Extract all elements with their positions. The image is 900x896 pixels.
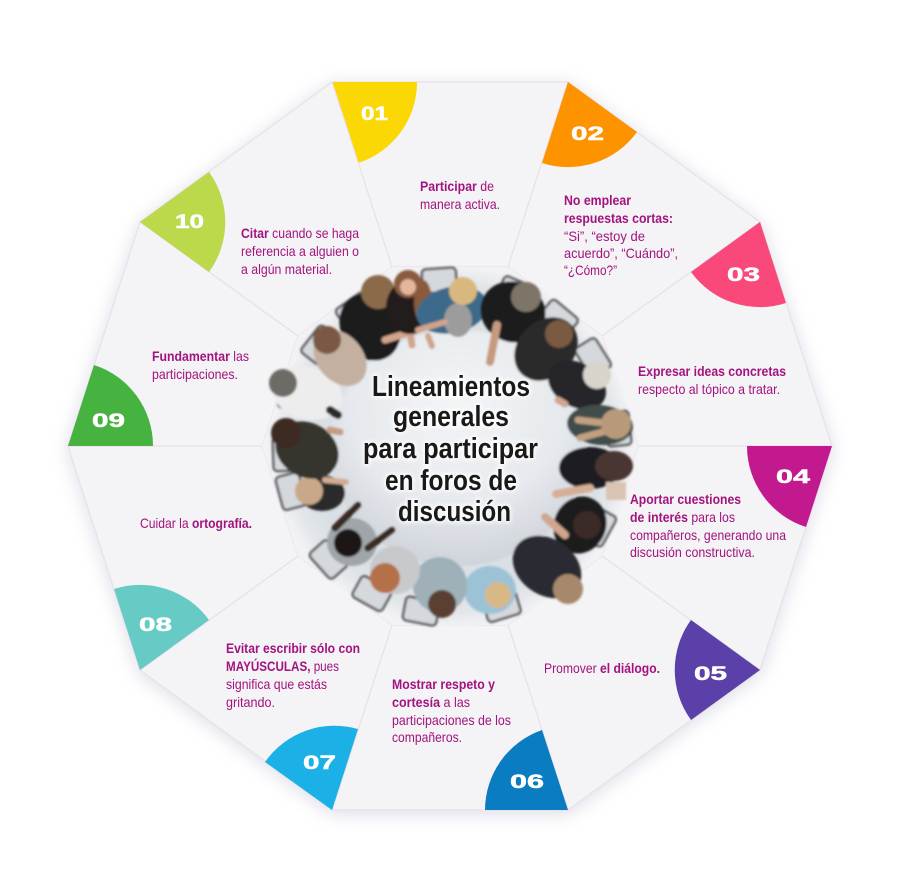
panel 01: participar [332,82,568,267]
text 02: “¿Cómo?” [564,262,617,278]
person 9 [544,488,616,562]
decagon shadow [68,85,832,813]
text 06: participaciones de los [392,712,511,728]
title: discusión [398,496,511,528]
text 07: MAYÚSCULAS, pues [226,657,339,674]
wedge 04 [747,446,832,527]
person 4 [470,271,556,362]
text 06 [392,676,511,745]
text 03 [638,363,786,397]
text 09: Fundamentar las [152,348,249,364]
text 02 [564,192,678,278]
person 15 [295,475,346,511]
title: generales [393,401,509,433]
number 08: 08 [139,614,172,636]
text 04 [630,491,786,560]
panel 03: ideas concretas [602,222,832,446]
wedge 03 [691,222,786,307]
text 04: compañeros, generando una [630,527,786,543]
text 02: “Si”, “estoy de [564,228,645,244]
person 7 [565,402,635,448]
text 07: Evitar escribir sólo con [226,640,360,656]
text 06: Mostrar respeto y [392,676,495,692]
number 07: 07 [303,752,336,774]
person 12 [413,557,467,618]
text 03: respecto al tópico a tratar. [638,381,780,397]
text 04: discusión constructiva. [630,544,755,560]
number 10: 10 [175,211,204,233]
text 09: participaciones. [152,366,238,382]
text 07: gritando. [226,694,275,710]
title: Lineamientos [372,371,530,403]
person 3 [412,277,492,346]
person 17 [265,359,349,427]
wedge 06 [485,730,568,810]
title: en foros de [385,465,517,497]
number 04: 04 [776,466,810,488]
wedge 02 [542,82,637,167]
person 8 [556,447,633,500]
text 09 [152,348,249,382]
person 11 [464,566,516,614]
title: para participar [363,433,538,465]
person 1 [327,275,417,372]
person 18 [302,319,378,397]
panel 04: cuestiones de interés [602,446,832,670]
text 03: Expresar ideas concretas [638,363,786,379]
text 01: manera activa. [420,196,500,212]
title: Lineamientos [372,371,530,403]
panel 10: citar [140,82,392,336]
text 07: significa que estás [226,676,327,692]
text 01: Participar de [420,178,494,194]
panel 07: mayúsculas [140,556,392,810]
person 6 [539,350,615,420]
panel 08: ortografía [68,446,298,670]
wedge 07 [265,726,358,810]
title: discusión [398,496,511,528]
number 01: 01 [361,103,388,125]
wedge 05 [675,620,760,720]
text 08: Cuidar la ortografía. [140,515,252,531]
number 06: 06 [510,771,544,793]
title: en foros de [385,465,517,497]
text 06: compañeros. [392,729,462,745]
number 02: 02 [571,123,604,145]
person 13 [370,546,420,594]
text 04: Aportar cuestiones [630,491,741,507]
panel 09: fundamentar [68,222,298,446]
title [363,371,538,528]
person 10 [501,523,593,611]
wedge 10 [140,172,225,272]
wedge 08 [114,585,209,670]
text 04: de interés para los [630,509,735,525]
text 10 [241,225,359,277]
text 01 [420,178,500,212]
wedge 01 [332,82,417,163]
panel 05: diálogo [508,556,760,810]
number 05: 05 [694,663,727,685]
central image: people around a table [262,267,638,627]
text 02: acuerdo”, “Cuándo”, [564,245,678,261]
title: para participar [363,433,538,465]
number 03: 03 [727,264,760,286]
person 2 [386,270,434,334]
title: generales [393,401,509,433]
text 10: referencia a alguien o [241,243,359,259]
text 07 [226,640,360,710]
text 02: respuestas cortas: [564,210,673,226]
text 05: Promover el diálogo. [544,660,660,676]
text 10: a algún material. [241,261,332,277]
person 16 [265,410,349,490]
panel 06: respeto y cortesía [332,625,568,810]
number 09: 09 [92,410,125,432]
person 14 [327,505,392,566]
panel 02: respuestas cortas [508,82,760,336]
wedge 09 [68,365,153,446]
person 5 [501,304,591,394]
text 02: No emplear [564,192,631,208]
text 10: Citar cuando se haga [241,225,359,241]
text 06: cortesía a las [392,694,470,710]
